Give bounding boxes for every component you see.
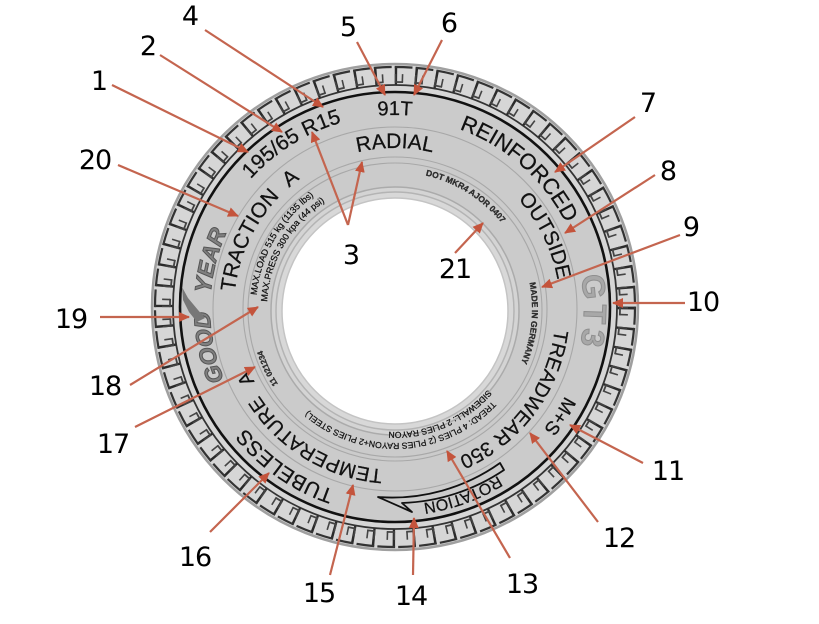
callout 13: 13 — [506, 569, 538, 600]
callout 9 — [542, 212, 699, 287]
max load: MAX.LOAD 515 kg (1135 lbs) — [250, 192, 314, 295]
callout 1: 1 — [91, 66, 107, 97]
serial: 11 021234 — [257, 350, 278, 386]
callout 10: 10 — [687, 287, 719, 318]
m+s: M+S — [546, 397, 576, 435]
callout 12 — [530, 433, 635, 554]
callout 11 — [570, 425, 684, 487]
callout 16: 16 — [179, 542, 211, 573]
callout 8 — [565, 156, 676, 233]
callout 13 — [447, 451, 538, 600]
treadwear: TREADWEAR 350 — [461, 332, 568, 468]
callout 17: 17 — [97, 429, 129, 460]
callout 2 — [140, 31, 282, 132]
callout 21: 21 — [439, 254, 471, 285]
max press: MAX.PRESS 300 kpa (44 psi) — [260, 198, 324, 302]
hole — [282, 198, 508, 424]
dot code: DOT MKR4 AJOR 0407 — [426, 170, 506, 222]
callout 15 — [303, 485, 353, 609]
bead band — [271, 187, 519, 435]
callout 19: 19 — [55, 304, 87, 335]
callout 21 — [439, 223, 483, 285]
callout 20: 20 — [79, 145, 111, 176]
size marking: 195/65 R15 — [243, 109, 340, 178]
callout 20 — [79, 145, 238, 216]
tread band — [152, 64, 638, 550]
traction: TRACTION A — [220, 171, 300, 290]
callout 5: 5 — [340, 12, 356, 43]
temperature grade: A — [238, 372, 255, 383]
outside: OUTSIDE — [521, 193, 572, 279]
callout 7 — [555, 88, 656, 172]
callout 6 — [414, 8, 457, 95]
sidewall — [180, 92, 610, 522]
callout 18: 18 — [89, 371, 121, 402]
made in germany: MADE IN GERMANY — [522, 282, 538, 365]
callout 14: 14 — [395, 581, 427, 612]
radial: RADIAL — [356, 133, 432, 152]
callout 7: 7 — [640, 88, 656, 119]
callout 16 — [179, 473, 269, 573]
callout 3 — [312, 132, 362, 271]
callout 5 — [340, 12, 385, 95]
callout 11: 11 — [652, 456, 684, 487]
model gt3: GT3 — [581, 275, 607, 346]
callout 18 — [89, 307, 258, 402]
callout 12: 12 — [603, 523, 635, 554]
callout 1 — [91, 66, 248, 152]
brand goodyear: GOODYEAR — [194, 227, 227, 382]
callout 10 — [613, 287, 719, 318]
callout 3: 3 — [343, 240, 359, 271]
sidewall rings — [213, 127, 577, 491]
sidewall text — [164, 58, 634, 558]
tubeless: TUBELESS — [236, 430, 330, 504]
temperature: TEMPERATURE — [248, 396, 381, 484]
callout 19 — [55, 304, 189, 335]
callout 4: 4 — [182, 1, 198, 32]
callout 14 — [395, 518, 427, 612]
rotation: ROTATION — [424, 476, 503, 514]
tire — [150, 62, 640, 552]
callout 8: 8 — [660, 156, 676, 187]
callout 4 — [182, 1, 323, 107]
icon: winged foot — [182, 287, 205, 322]
callout 9: 9 — [683, 212, 699, 243]
callout 2: 2 — [140, 31, 156, 62]
rotation arrow — [378, 463, 504, 512]
callout 17 — [97, 367, 255, 460]
callout 6: 6 — [441, 8, 457, 39]
load speed index: 91T — [378, 101, 413, 116]
callout 15: 15 — [303, 578, 335, 609]
reinforced: REINFORCED — [460, 116, 576, 220]
tread plies: TREAD: 4 PLIES (2 PLIES RAYON+2 PLIES STEEL) — [305, 402, 497, 450]
sidewall plies: SIDEWALL: 2 PLIES RAYON — [388, 390, 492, 438]
